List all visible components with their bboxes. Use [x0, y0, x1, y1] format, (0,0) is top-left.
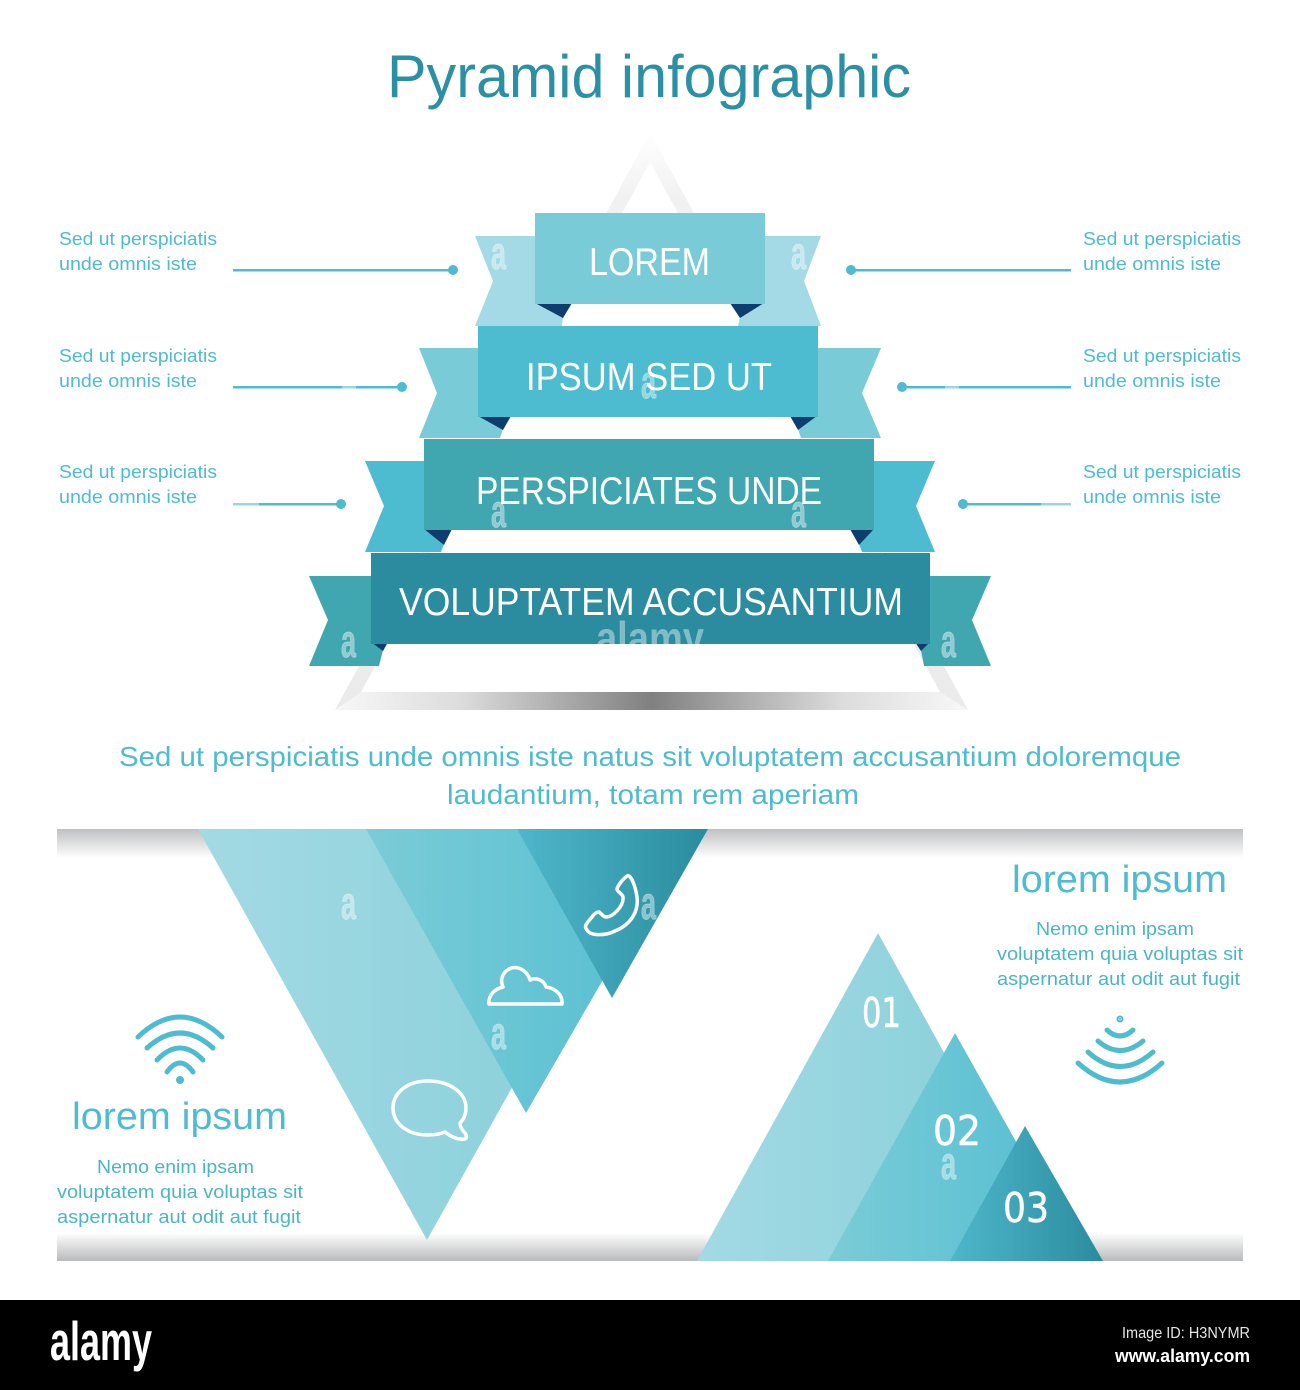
upright triangle group — [697, 933, 1103, 1261]
body text: aspernatur aut odit aut fugit — [57, 1206, 301, 1227]
left text block — [57, 1017, 303, 1227]
ribbon level 1: LOREM — [475, 213, 821, 326]
right text block — [997, 859, 1243, 1082]
stock watermark marks: a — [641, 877, 656, 929]
stock watermark marks: a — [641, 356, 656, 408]
title: Pyramid infographic — [387, 43, 911, 110]
stock watermark marks: a — [941, 1137, 956, 1189]
middle triangle 02 — [828, 1033, 1083, 1261]
body text: Nemo enim ipsam — [97, 1156, 254, 1177]
body text: aspernatur aut odit aut fugit — [997, 968, 1240, 989]
inverted triangle group — [198, 829, 708, 1240]
left callout 2: unde omnis iste — [59, 371, 197, 391]
icon: phone — [586, 876, 637, 935]
body text: voluptatem quia voluptas sit — [57, 1181, 303, 1202]
large triangle 01 — [697, 933, 1059, 1261]
icon: cloud — [489, 968, 562, 1004]
background triangle outline — [335, 133, 968, 710]
stock watermark marks: a — [491, 1007, 506, 1059]
icon: wifi — [138, 1017, 222, 1082]
stock watermark marks: a — [941, 615, 956, 667]
body text: Nemo enim ipsam — [1036, 918, 1194, 939]
website: www.alamy.com — [1114, 1346, 1250, 1366]
stock watermark marks — [233, 227, 1071, 1189]
right callout 1: Sed ut perspiciatis — [1083, 229, 1241, 249]
middle inverted triangle — [366, 829, 690, 1113]
summary text — [119, 741, 1181, 810]
right callout 1: unde omnis iste — [1083, 254, 1221, 274]
icon: inverted wifi — [1078, 1018, 1162, 1082]
ribbon level 4: VOLUPTATEM ACCUSANTIUM — [309, 553, 991, 666]
right callouts — [846, 229, 1241, 509]
stock watermark marks: a — [791, 227, 806, 279]
ribbon level 2: IPSUM SED UT: IPSUM SED UT — [526, 356, 772, 399]
small triangle 03 — [950, 1126, 1103, 1261]
left callout 1: Sed ut perspiciatis — [59, 229, 217, 249]
small inverted triangle — [517, 829, 708, 998]
left callout 2: Sed ut perspiciatis — [59, 346, 217, 366]
ribbon level 3: PERSPICIATES UNDE — [365, 439, 935, 552]
icon: speech bubble — [393, 1081, 466, 1139]
right callout 2: Sed ut perspiciatis — [1083, 346, 1241, 366]
left callout 2 — [59, 346, 407, 392]
summary text: laudantium, totam rem aperiam — [447, 779, 859, 810]
ribbon level 1: LOREM: LOREM — [589, 241, 710, 284]
heading: lorem ipsum: lorem ipsum — [72, 1096, 287, 1138]
stock watermark marks: alamy — [596, 612, 704, 664]
stock watermark marks: a — [341, 615, 356, 667]
stock watermark marks: a — [341, 877, 356, 929]
right callout 3: unde omnis iste — [1083, 487, 1221, 507]
number 01: 01 — [862, 989, 901, 1037]
heading: lorem ipsum: lorem ipsum — [1012, 859, 1227, 901]
right callout 3: Sed ut perspiciatis — [1083, 462, 1241, 482]
stock watermark marks: a — [791, 485, 806, 537]
footer logo: alamy — [50, 1310, 152, 1372]
pyramid ribbon stack — [309, 213, 991, 666]
right callout 2: unde omnis iste — [1083, 371, 1221, 391]
right callout 1 — [846, 229, 1241, 275]
ribbon level 3: PERSPICIATES UNDE: PERSPICIATES UNDE — [476, 470, 822, 513]
left callout 3: unde omnis iste — [59, 487, 197, 507]
body text — [997, 918, 1243, 989]
body text — [57, 1156, 303, 1227]
image id: Image ID: H3NYMR — [1122, 1325, 1250, 1342]
left callouts — [59, 229, 458, 509]
large inverted triangle — [198, 829, 656, 1240]
stock watermark marks: a — [491, 227, 506, 279]
body text: voluptatem quia voluptas sit — [997, 943, 1243, 964]
number 02: 02 — [933, 1107, 981, 1155]
footer bar — [0, 1300, 1300, 1390]
stock watermark marks: a — [491, 485, 506, 537]
right callout 3 — [958, 462, 1241, 509]
left callout 3 — [59, 462, 346, 509]
left callout 3: Sed ut perspiciatis — [59, 462, 217, 482]
left callout 1: unde omnis iste — [59, 254, 197, 274]
ribbon level 4: VOLUPTATEM ACCUSANTIUM: VOLUPTATEM ACCUSANTIUM — [399, 581, 903, 624]
ribbon level 2: IPSUM SED UT — [419, 326, 881, 438]
lower panel gradient bands — [57, 829, 1243, 1261]
number 03: 03 — [1003, 1184, 1049, 1232]
left callout 1 — [59, 229, 458, 275]
summary text: Sed ut perspiciatis unde omnis iste natus sit voluptatem accusantium doloremque — [119, 741, 1181, 772]
right callout 2 — [897, 346, 1241, 392]
